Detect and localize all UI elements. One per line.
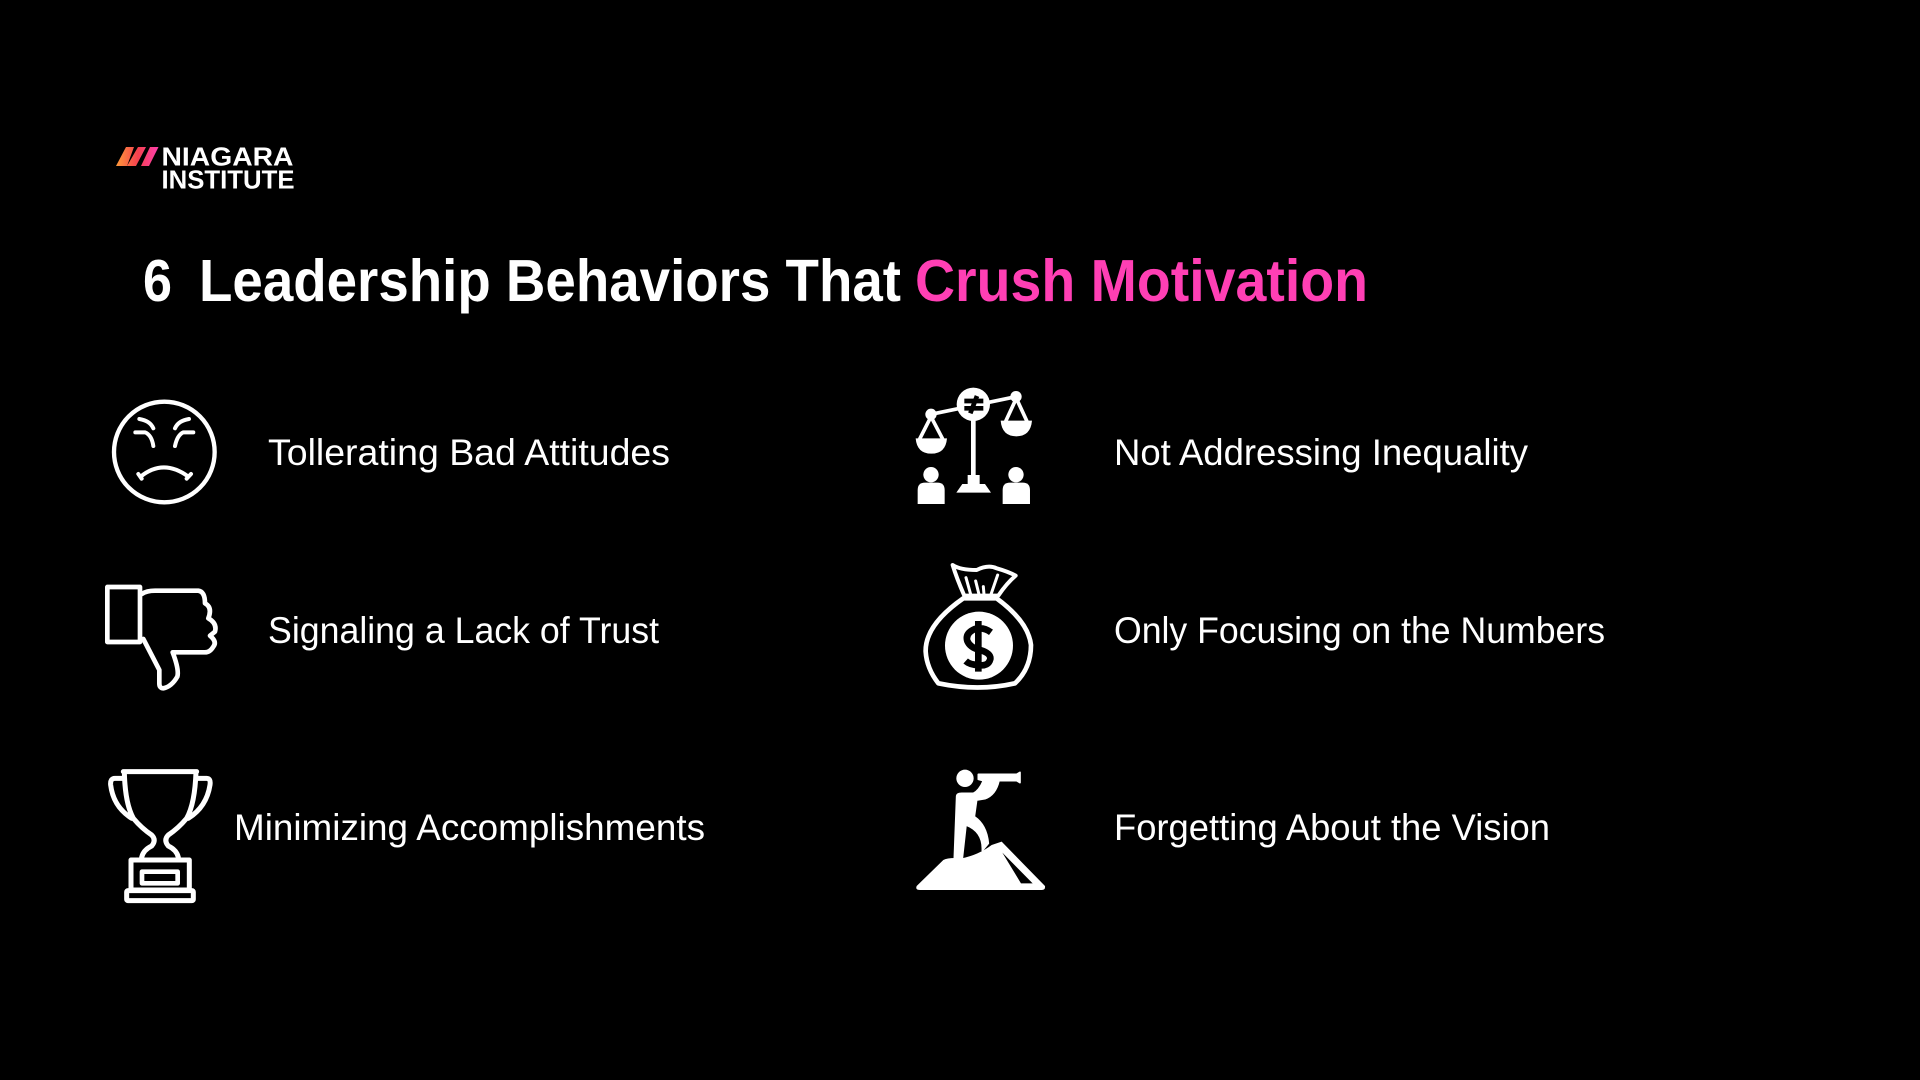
label: signaling a lack of trust: Signaling a Lack of Trust — [268, 610, 660, 651]
icon: person with telescope on a hill — [916, 770, 1045, 890]
title: 6 — [143, 248, 172, 314]
logo: Niagara Institute — [116, 142, 294, 194]
icon: angry face — [114, 402, 215, 502]
title: Leadership Behaviors That — [199, 248, 901, 314]
icon: money bag — [926, 565, 1031, 687]
icon: trophy — [111, 772, 210, 901]
logo: Niagara Institute: INSTITUTE — [162, 164, 294, 194]
title: Crush Motivation — [915, 248, 1368, 314]
label: tolerating bad attitudes: Tollerating Bad Attitudes — [268, 432, 670, 473]
label: only focusing on the numbers: Only Focusing on the Numbers — [1114, 610, 1605, 651]
label: forgetting about the vision: Forgetting About the Vision — [1114, 807, 1550, 848]
label: not addressing inequality: Not Addressing Inequality — [1114, 432, 1528, 473]
logo: Niagara Institute: NIAGARA — [162, 142, 294, 172]
title — [143, 248, 1368, 314]
icon: unequal scales — [916, 388, 1032, 504]
icon: thumbs down — [107, 587, 215, 688]
label: minimizing accomplishments: Minimizing Accomplishments — [234, 807, 705, 848]
